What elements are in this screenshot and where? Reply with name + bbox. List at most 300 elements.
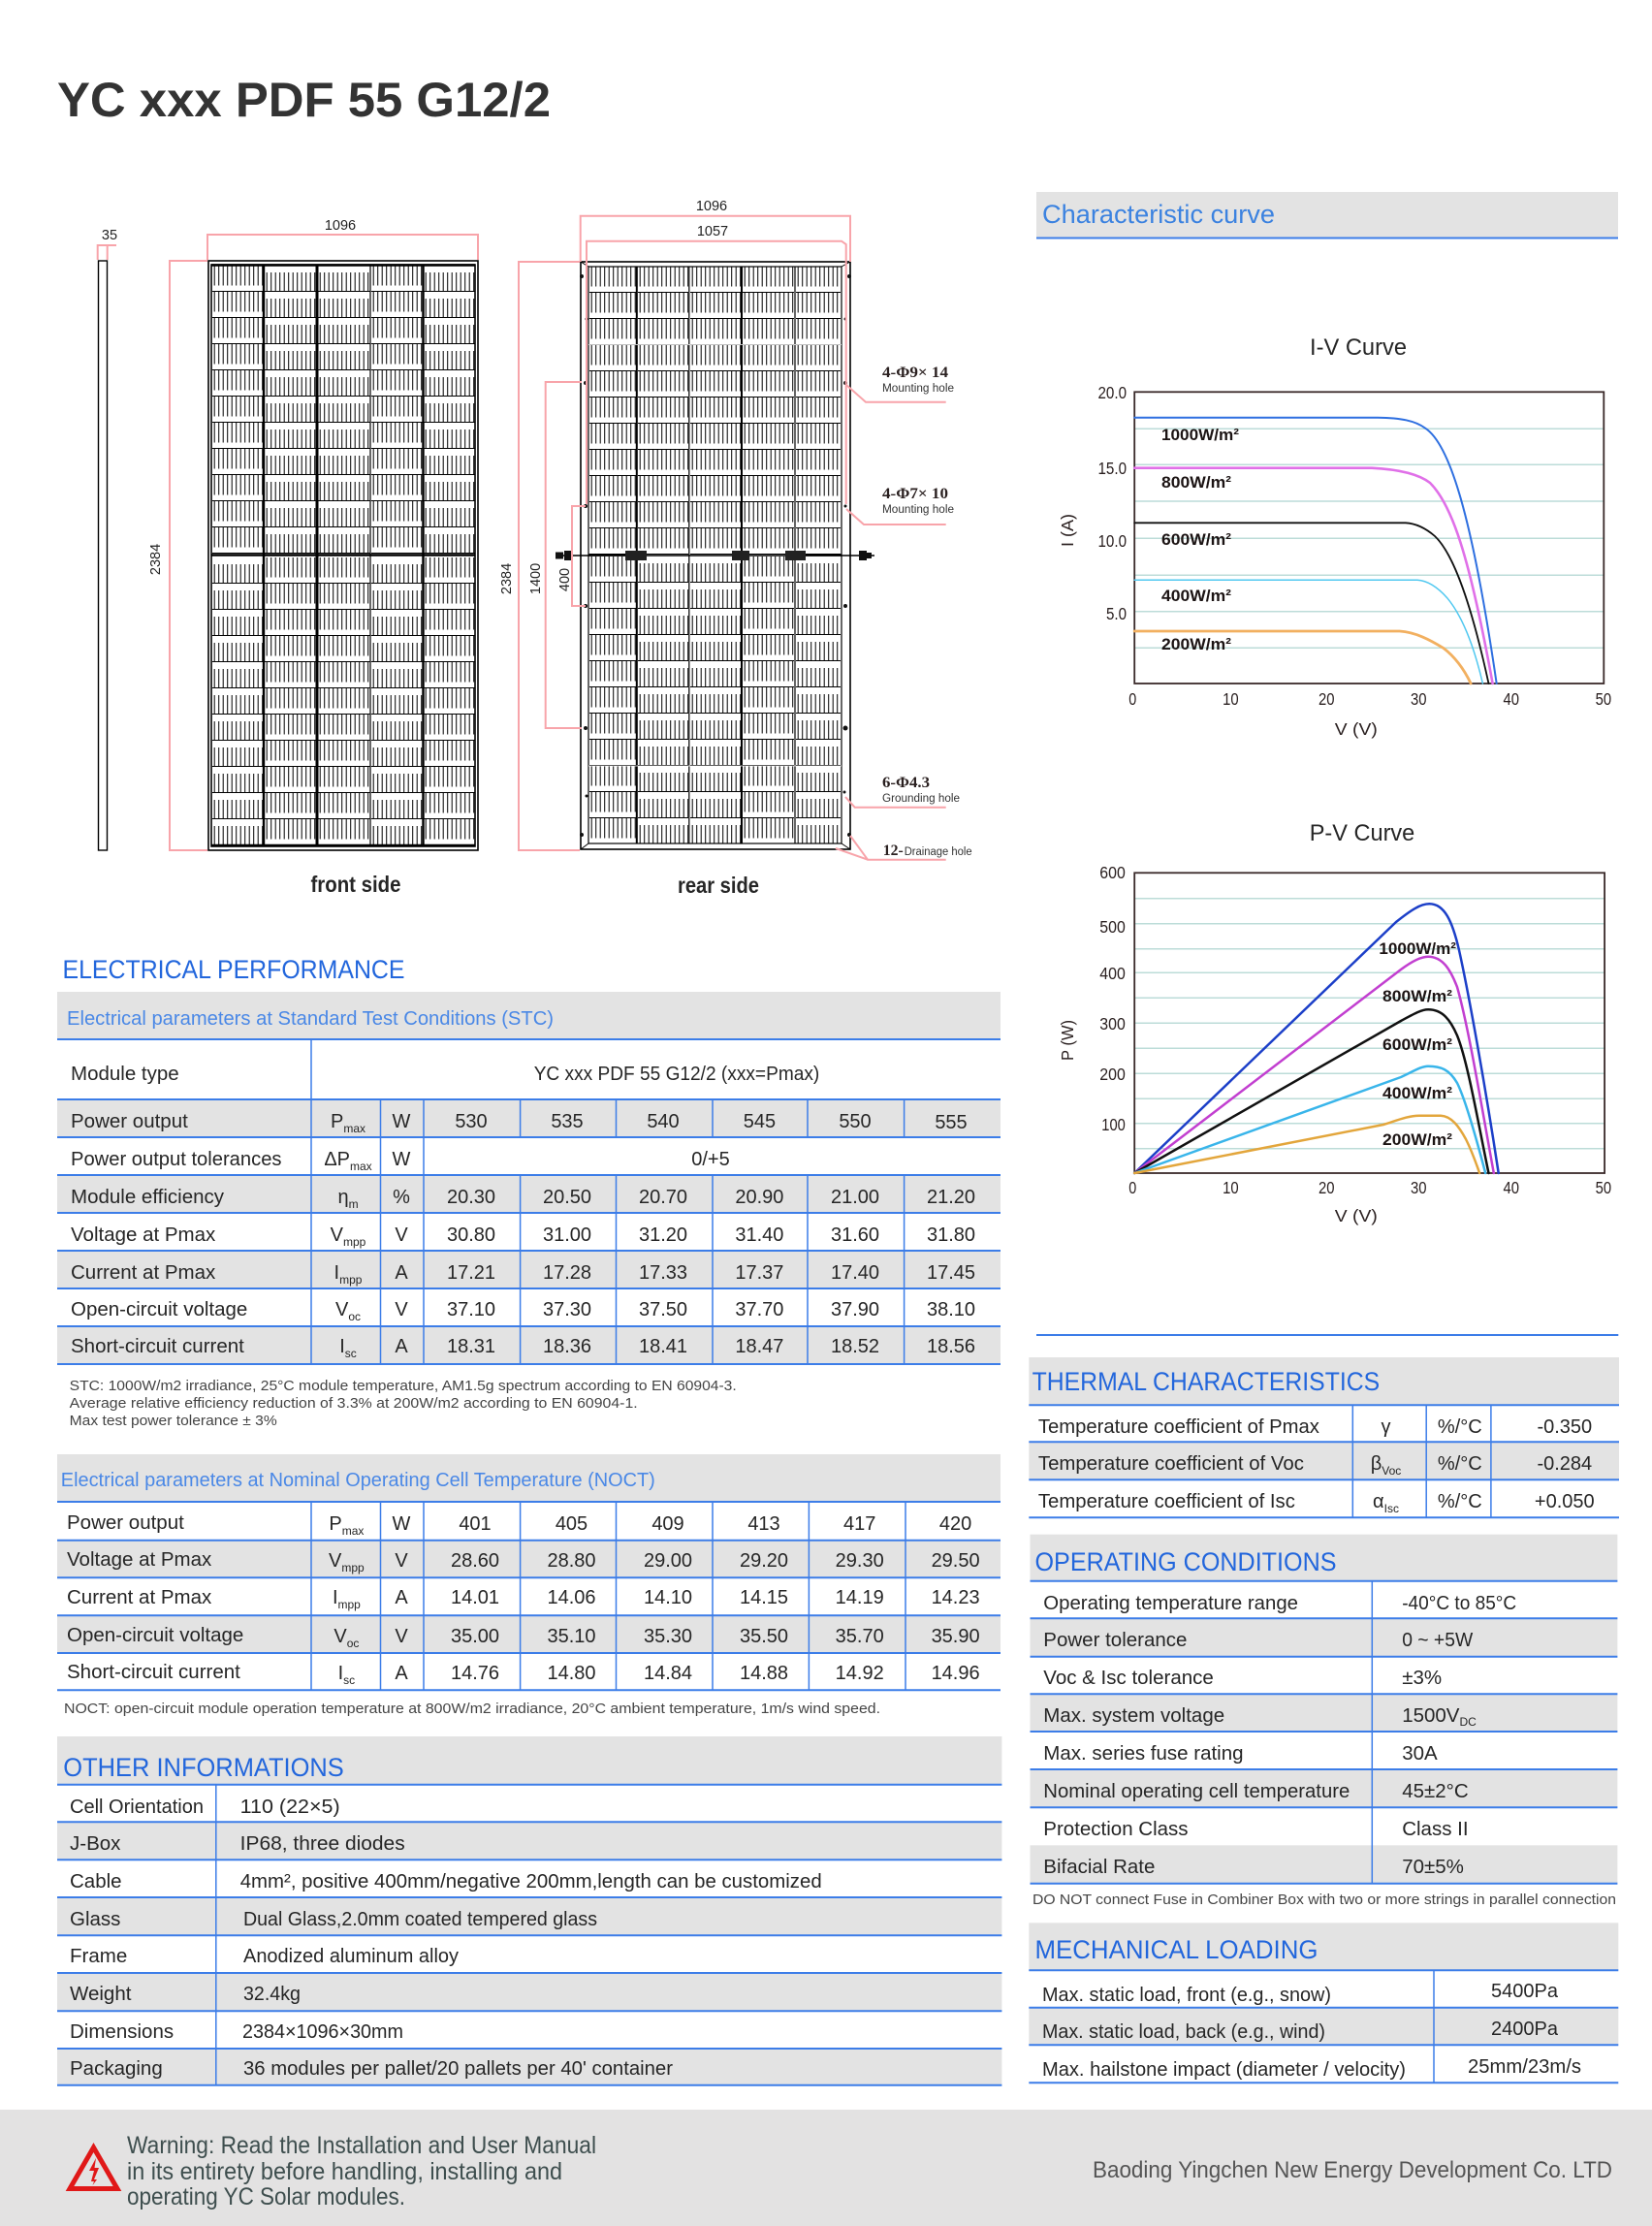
rear dimensions: 2384 bbox=[499, 563, 515, 594]
STC row: module efficiency: η bbox=[337, 1187, 349, 1208]
STC row: module efficiency: % bbox=[393, 1187, 410, 1208]
callout: 12-drainage hole: 12- bbox=[883, 843, 904, 859]
STC row: module type bbox=[71, 1063, 819, 1085]
STC row: open-circuit voltage: V bbox=[335, 1299, 348, 1320]
mechanical row: back load: Max. static load, back (e.g., wind) bbox=[1042, 2020, 1325, 2043]
STC row: open-circuit voltage: 38.10 bbox=[927, 1299, 975, 1320]
callout: 12-drainage hole bbox=[836, 836, 972, 860]
operating row: power tolerance: Power tolerance bbox=[1043, 1629, 1187, 1651]
NOCT row: open-circuit voltage: 35.90 bbox=[932, 1626, 980, 1647]
P-V irradiance labels: 600W/m² bbox=[1382, 1035, 1452, 1054]
STC row: short-circuit current: sc bbox=[345, 1347, 357, 1360]
text block: NOCT note: NOCT: open-circuit module operation temperature at 800W/m2 irradiance, 20°C ambient temperature, 1m/s wind speed. bbox=[64, 1701, 880, 1717]
operating row: Voc and Isc tolerance: Voc & Isc tolerance bbox=[1043, 1667, 1214, 1689]
NOCT row: current at Pmax: 14.01 bbox=[451, 1587, 499, 1608]
title: YC xxx PDF 55 G12/2 bbox=[57, 73, 551, 127]
STC row: current at Pmax: I bbox=[334, 1262, 339, 1284]
NOCT row: short-circuit current bbox=[67, 1661, 980, 1687]
NOCT row: power output bbox=[67, 1511, 971, 1538]
NOCT row: open-circuit voltage: Open-circuit voltage bbox=[67, 1624, 243, 1646]
I-V axis labels: 20.0 bbox=[1097, 383, 1127, 402]
thermal row: Voc: -0.284 bbox=[1537, 1453, 1592, 1475]
callout: 6-Φ4.3 grounding hole: Grounding hole bbox=[882, 793, 960, 805]
panel: characteristic curve heading bbox=[1036, 192, 1618, 238]
row: dimensions bbox=[70, 2020, 403, 2043]
text block: STC notes bbox=[70, 1379, 737, 1429]
NOCT row: open-circuit voltage: 35.50 bbox=[740, 1626, 788, 1647]
P-V axis labels: 300 bbox=[1099, 1014, 1126, 1034]
STC row: power output tolerances: W bbox=[393, 1149, 411, 1170]
I-V axis labels: 20 bbox=[1318, 689, 1335, 709]
STC row: short-circuit current: 18.31 bbox=[447, 1336, 495, 1357]
P-V irradiance labels bbox=[1379, 939, 1456, 1149]
NOCT row: short-circuit current: 14.96 bbox=[932, 1663, 980, 1684]
callout: 6-Φ4.3 grounding hole bbox=[845, 775, 960, 808]
row: glass: Dual Glass,2.0mm coated tempered glass bbox=[243, 1908, 597, 1930]
NOCT row: open-circuit voltage: 35.30 bbox=[644, 1626, 692, 1647]
row: weight: 32.4kg bbox=[243, 1983, 301, 2005]
I-V axis labels: 40 bbox=[1504, 689, 1519, 709]
P-V irradiance labels: 200W/m² bbox=[1382, 1130, 1452, 1149]
STC row: open-circuit voltage: 37.90 bbox=[831, 1299, 879, 1320]
STC header bar: Electrical parameters at Standard Test Conditions (STC) bbox=[67, 1008, 554, 1030]
STC row: voltage at Pmax: 31.40 bbox=[735, 1224, 783, 1246]
other informations row shading bbox=[57, 1822, 1001, 2085]
mechanical row: hailstone impact bbox=[1042, 2056, 1581, 2081]
text block: STC notes: Average relative efficiency reduction of 3.3% at 200W/m2 according to EN 60904-1. bbox=[70, 1396, 638, 1412]
STC row: module efficiency: m bbox=[349, 1197, 359, 1211]
row: dimensions: 2384×1096×30mm bbox=[242, 2020, 403, 2043]
STC row: power output bbox=[71, 1110, 968, 1135]
NOCT row: open-circuit voltage: oc bbox=[347, 1637, 359, 1650]
NOCT header bar bbox=[57, 1454, 1001, 1502]
STC row: short-circuit current: I bbox=[339, 1336, 345, 1357]
NOCT row: short-circuit current: sc bbox=[343, 1673, 355, 1687]
NOCT row: power output: max bbox=[342, 1524, 364, 1538]
rear dimensions bbox=[499, 199, 850, 850]
NOCT row: open-circuit voltage: V bbox=[395, 1626, 408, 1647]
operating row: Voc and Isc tolerance: ±3% bbox=[1402, 1667, 1442, 1689]
front dimensions: 2384 bbox=[148, 544, 164, 575]
row: glass bbox=[70, 1908, 597, 1930]
NOCT row: short-circuit current: 14.88 bbox=[740, 1663, 788, 1684]
STC row shading bbox=[57, 1099, 1001, 1364]
P-V irradiance labels: 800W/m² bbox=[1382, 987, 1452, 1005]
NOCT row: current at Pmax: 14.10 bbox=[644, 1587, 692, 1608]
I-V axis labels: 30 bbox=[1411, 689, 1427, 709]
I-V axis labels: 50 bbox=[1596, 689, 1611, 709]
panel: side view drawing: 35 bbox=[102, 228, 117, 243]
NOCT row: power output: 401 bbox=[459, 1513, 492, 1535]
STC row: voltage at Pmax bbox=[71, 1224, 975, 1249]
NOCT row: power output: 420 bbox=[939, 1513, 971, 1535]
STC row: current at Pmax: Current at Pmax bbox=[71, 1261, 216, 1284]
row: cell orientation: Cell Orientation bbox=[70, 1796, 204, 1818]
callout: 4-Φ7×10 mounting hole: Mounting hole bbox=[882, 504, 954, 516]
STC row: power output: 545 bbox=[744, 1111, 776, 1132]
STC row: short-circuit current: 18.52 bbox=[831, 1336, 879, 1357]
NOCT row: open-circuit voltage: 35.00 bbox=[451, 1626, 499, 1647]
NOCT row: open-circuit voltage: 35.70 bbox=[836, 1626, 884, 1647]
row: cell orientation bbox=[70, 1796, 340, 1818]
thermal row: Pmax: Temperature coefficient of Pmax bbox=[1038, 1415, 1320, 1438]
NOCT row: short-circuit current: 14.84 bbox=[644, 1663, 692, 1684]
STC row: short-circuit current bbox=[71, 1335, 975, 1360]
P-V axis labels: 600 bbox=[1099, 863, 1126, 882]
STC row: voltage at Pmax: 30.80 bbox=[447, 1224, 495, 1246]
NOCT row: voltage at Pmax: Voltage at Pmax bbox=[67, 1548, 212, 1571]
STC row: module efficiency: 21.00 bbox=[831, 1187, 879, 1208]
thermal row: Pmax: %/°C bbox=[1438, 1416, 1482, 1438]
thermal row: Voc: Temperature coefficient of Voc bbox=[1038, 1452, 1304, 1475]
P-V axis labels: V (V) bbox=[1335, 1206, 1378, 1225]
thermal row: Voc: β bbox=[1371, 1453, 1382, 1475]
P-V curves bbox=[1134, 904, 1499, 1173]
STC row: power output tolerances: Power output tolerances bbox=[71, 1148, 281, 1170]
thermal row: Isc: Temperature coefficient of Isc bbox=[1038, 1490, 1295, 1512]
I-V axis labels: 10 bbox=[1223, 689, 1239, 709]
NOCT row: power output: W bbox=[393, 1513, 411, 1535]
STC row: voltage at Pmax: V bbox=[395, 1224, 408, 1246]
STC row: power output tolerances: max bbox=[350, 1160, 372, 1173]
STC row: open-circuit voltage: 37.70 bbox=[735, 1299, 783, 1320]
NOCT row: current at Pmax: 14.06 bbox=[547, 1587, 596, 1608]
operating row: max series fuse rating: 30A bbox=[1402, 1742, 1438, 1765]
front dimensions: 1096 bbox=[325, 218, 356, 234]
NOCT row: voltage at Pmax: 29.20 bbox=[740, 1550, 788, 1572]
NOCT row: voltage at Pmax: 29.50 bbox=[932, 1550, 980, 1572]
P-V axis labels: 0 bbox=[1128, 1178, 1136, 1197]
NOCT row: voltage at Pmax: V bbox=[395, 1550, 408, 1572]
operating shading and grid bbox=[1030, 1581, 1617, 1884]
NOCT row: power output: 417 bbox=[843, 1513, 875, 1535]
STC row: current at Pmax: 17.33 bbox=[639, 1262, 687, 1284]
operating row: protection class: Class II bbox=[1402, 1818, 1469, 1840]
NOCT row: current at Pmax: 14.15 bbox=[740, 1587, 788, 1608]
row: glass: Glass bbox=[70, 1908, 120, 1930]
NOCT row: power output: 405 bbox=[556, 1513, 588, 1535]
mechanical header: MECHANICAL LOADING bbox=[1035, 1935, 1318, 1964]
text block: warning: Warning: Read the Installation and User Manual bbox=[127, 2132, 596, 2159]
rear dimensions: 1057 bbox=[697, 224, 728, 239]
STC row: open-circuit voltage bbox=[71, 1298, 975, 1323]
STC row: power output: 530 bbox=[455, 1111, 488, 1132]
NOCT row: power output: Power output bbox=[67, 1511, 184, 1534]
callout: 4-Φ9×14 mounting hole bbox=[846, 365, 954, 402]
text block: company name: Baoding Yingchen New Energy Development Co. LTD bbox=[1093, 2157, 1612, 2183]
NOCT row: voltage at Pmax: 28.80 bbox=[547, 1550, 596, 1572]
row: dimensions: Dimensions bbox=[70, 2020, 174, 2043]
NOCT row: current at Pmax: mpp bbox=[338, 1598, 361, 1611]
operating row: Voc and Isc tolerance bbox=[1043, 1667, 1442, 1689]
STC row: current at Pmax: 17.40 bbox=[831, 1262, 879, 1284]
NOCT row: voltage at Pmax bbox=[67, 1548, 980, 1574]
I-V axis labels: 0 bbox=[1128, 689, 1136, 709]
mechanical row: hailstone impact: Max. hailstone impact (diameter / velocity) bbox=[1042, 2058, 1406, 2081]
NOCT row: current at Pmax: 14.23 bbox=[932, 1587, 980, 1608]
I-V axis labels bbox=[1058, 383, 1611, 739]
P-V axis labels: 50 bbox=[1596, 1178, 1611, 1197]
NOCT row: current at Pmax: 14.19 bbox=[836, 1587, 884, 1608]
row: cell orientation: 110 (22×5) bbox=[240, 1796, 340, 1818]
panel: STC table bbox=[57, 992, 1001, 1364]
STC row: power output: P bbox=[331, 1111, 343, 1132]
operating header bbox=[1030, 1535, 1617, 1581]
NOCT header bar: Electrical parameters at Nominal Operating Cell Temperature (NOCT) bbox=[61, 1470, 655, 1491]
panel: mechanical loading bbox=[1029, 1923, 1618, 2083]
operating row: power tolerance: 0 ~ +5W bbox=[1402, 1629, 1474, 1651]
I-V irradiance labels bbox=[1161, 426, 1239, 653]
NOCT row: current at Pmax: Current at Pmax bbox=[67, 1586, 212, 1608]
STC row: voltage at Pmax: 31.80 bbox=[927, 1224, 975, 1246]
NOCT row: voltage at Pmax: mpp bbox=[341, 1561, 365, 1574]
I-V irradiance labels: 800W/m² bbox=[1161, 473, 1231, 492]
rear module frame bbox=[581, 262, 850, 849]
STC row: voltage at Pmax: Voltage at Pmax bbox=[71, 1224, 216, 1246]
NOCT row: open-circuit voltage: V bbox=[334, 1626, 347, 1647]
STC row: power output: 540 bbox=[647, 1111, 680, 1132]
STC row: current at Pmax: A bbox=[395, 1262, 408, 1284]
P-V irradiance labels: 1000W/m² bbox=[1379, 939, 1456, 958]
STC row: power output tolerances: 0/+5 bbox=[691, 1149, 730, 1170]
thermal header: THERMAL CHARACTERISTICS bbox=[1032, 1367, 1380, 1396]
row: packaging: 36 modules per pallet/20 pallets per 40' container bbox=[243, 2057, 673, 2080]
operating row: nominal operating cell temperature: Nominal operating cell temperature bbox=[1043, 1780, 1350, 1802]
STC row: module type: Module type bbox=[71, 1063, 179, 1085]
NOCT row: current at Pmax bbox=[67, 1586, 980, 1611]
text block: warning: in its entirety before handling, installing and bbox=[127, 2158, 562, 2185]
STC row: power output: 535 bbox=[551, 1111, 584, 1132]
thermal row: Pmax: -0.350 bbox=[1537, 1416, 1592, 1438]
STC row: voltage at Pmax: mpp bbox=[343, 1235, 366, 1249]
panel: front side drawing bbox=[148, 218, 478, 897]
STC row: module efficiency: Module efficiency bbox=[71, 1186, 225, 1208]
operating row: bifacial rate bbox=[1043, 1856, 1464, 1878]
callout: 4-Φ7×10 mounting hole: 4-Φ7× 10 bbox=[882, 486, 948, 502]
I-V axis labels: 10.0 bbox=[1097, 531, 1127, 551]
row: J-Box: IP68, three diodes bbox=[240, 1832, 405, 1855]
I-V axis labels: V (V) bbox=[1335, 719, 1378, 739]
operating row: temperature range: Operating temperature range bbox=[1043, 1592, 1298, 1614]
NOCT row: short-circuit current: A bbox=[395, 1663, 408, 1684]
operating row: max series fuse rating bbox=[1043, 1742, 1438, 1765]
STC row: short-circuit current: Short-circuit current bbox=[71, 1335, 244, 1357]
STC row: module efficiency: 21.20 bbox=[927, 1187, 975, 1208]
text block: STC notes: Max test power tolerance ± 3% bbox=[70, 1414, 277, 1429]
I-V curves bbox=[1134, 418, 1497, 684]
NOCT row: short-circuit current: 14.76 bbox=[451, 1663, 499, 1684]
label: rear side: rear side bbox=[678, 873, 759, 898]
panel: other informations table bbox=[57, 1736, 1001, 2085]
operating row: max system voltage: 1500V bbox=[1402, 1704, 1459, 1727]
thermal row: Isc: Isc bbox=[1384, 1502, 1399, 1515]
mechanical row: hailstone impact: 25mm/23m/s bbox=[1468, 2056, 1581, 2078]
mechanical row: back load bbox=[1042, 2019, 1559, 2043]
panel: side view drawing bbox=[98, 228, 117, 850]
icon: electric hazard warning triangle bbox=[70, 2147, 117, 2189]
STC row: short-circuit current: 18.41 bbox=[639, 1336, 687, 1357]
rear dimensions: 1096 bbox=[696, 199, 727, 214]
P-V axis labels: 100 bbox=[1101, 1115, 1126, 1134]
row: weight bbox=[70, 1983, 301, 2005]
operating row: temperature range bbox=[1043, 1592, 1516, 1614]
STC grid bbox=[57, 1039, 1001, 1364]
operating row: max system voltage: Max. system voltage bbox=[1043, 1704, 1224, 1727]
STC row: open-circuit voltage: oc bbox=[348, 1310, 361, 1323]
operating row: nominal operating cell temperature: 45±2°C bbox=[1402, 1780, 1469, 1802]
STC row: open-circuit voltage: Open-circuit voltage bbox=[71, 1298, 247, 1320]
NOCT row: open-circuit voltage: 35.10 bbox=[547, 1626, 596, 1647]
NOCT row: open-circuit voltage bbox=[67, 1624, 980, 1650]
STC row: current at Pmax bbox=[71, 1261, 975, 1287]
callout: 6-Φ4.3 grounding hole: 6-Φ4.3 bbox=[882, 775, 930, 791]
NOCT row: voltage at Pmax: 29.30 bbox=[836, 1550, 884, 1572]
NOCT row: short-circuit current: Short-circuit current bbox=[67, 1661, 240, 1683]
NOCT row: voltage at Pmax: V bbox=[329, 1550, 341, 1572]
thermal row: Isc: %/°C bbox=[1438, 1491, 1482, 1512]
STC row: open-circuit voltage: 37.50 bbox=[639, 1299, 687, 1320]
text block: fuse warning note: DO NOT connect Fuse in Combiner Box with two or more strings in parallel connection bbox=[1032, 1892, 1616, 1908]
NOCT row: short-circuit current: I bbox=[338, 1663, 343, 1684]
chart: P-V curve: P-V Curve bbox=[1310, 820, 1414, 846]
label: front side: front side bbox=[310, 872, 401, 897]
STC row: voltage at Pmax: V bbox=[331, 1224, 343, 1246]
STC row: short-circuit current: 18.56 bbox=[927, 1336, 975, 1357]
P-V axis labels: 400 bbox=[1099, 964, 1126, 983]
STC row: power output tolerances bbox=[71, 1148, 730, 1173]
NOCT row: power output: 413 bbox=[747, 1513, 780, 1535]
STC row: current at Pmax: mpp bbox=[339, 1273, 363, 1287]
callout: 12-drainage hole: Drainage hole bbox=[905, 846, 972, 858]
heading: electrical performance: ELECTRICAL PERFORMANCE bbox=[62, 955, 405, 984]
callout: 4-Φ9×14 mounting hole: 4-Φ9× 14 bbox=[882, 365, 948, 381]
mechanical row: front load: Max. static load, front (e.g., snow) bbox=[1042, 1984, 1331, 2006]
NOCT row: voltage at Pmax: 28.60 bbox=[451, 1550, 499, 1572]
STC row: short-circuit current: 18.47 bbox=[735, 1336, 783, 1357]
NOCT row: power output: 409 bbox=[651, 1513, 684, 1535]
panel: operating conditions bbox=[1030, 1535, 1617, 1884]
panel: footer bbox=[0, 2110, 1652, 2226]
I-V irradiance labels: 600W/m² bbox=[1161, 530, 1231, 549]
P-V axis labels: 500 bbox=[1099, 917, 1126, 937]
thermal header bbox=[1029, 1357, 1619, 1405]
operating row: protection class bbox=[1043, 1818, 1469, 1840]
mechanical row: front load: 5400Pa bbox=[1491, 1981, 1559, 2002]
mounting holes bbox=[580, 274, 851, 837]
I-V irradiance labels: 400W/m² bbox=[1161, 587, 1231, 605]
operating row: max system voltage bbox=[1043, 1704, 1477, 1729]
P-V axis labels: 10 bbox=[1223, 1178, 1239, 1197]
STC header bar bbox=[57, 992, 1001, 1039]
text block: warning bbox=[127, 2132, 596, 2210]
STC row: power output: 555 bbox=[935, 1112, 968, 1133]
thermal shading and grid bbox=[1029, 1405, 1619, 1517]
NOCT row: current at Pmax: A bbox=[395, 1587, 408, 1608]
NOCT row: short-circuit current: 14.80 bbox=[547, 1663, 596, 1684]
P-V axis labels: 30 bbox=[1411, 1178, 1427, 1197]
thermal row: Isc: +0.050 bbox=[1535, 1491, 1595, 1512]
P-V axis labels: 40 bbox=[1504, 1178, 1519, 1197]
STC row: current at Pmax: 17.37 bbox=[735, 1262, 783, 1284]
text block: warning: operating YC Solar modules. bbox=[127, 2183, 405, 2210]
NOCT row: short-circuit current: 14.92 bbox=[836, 1663, 884, 1684]
panel: rear side drawing bbox=[499, 199, 972, 898]
operating row: max system voltage: DC bbox=[1459, 1715, 1477, 1729]
operating row: temperature range: -40°C to 85°C bbox=[1402, 1592, 1516, 1614]
STC row: power output: Power output bbox=[71, 1110, 188, 1132]
thermal row: Voc: %/°C bbox=[1438, 1453, 1482, 1475]
I-V irradiance labels: 1000W/m² bbox=[1161, 426, 1239, 444]
row: frame bbox=[70, 1945, 460, 1967]
I-V irradiance labels: 200W/m² bbox=[1161, 635, 1231, 653]
STC row: current at Pmax: 17.28 bbox=[543, 1262, 591, 1284]
STC row: module efficiency: 20.90 bbox=[735, 1187, 783, 1208]
rear dimensions: 1400 bbox=[528, 563, 544, 594]
thermal row: Voc bbox=[1038, 1452, 1592, 1478]
P-V irradiance labels: 400W/m² bbox=[1382, 1084, 1452, 1102]
STC row: voltage at Pmax: 31.00 bbox=[543, 1224, 591, 1246]
text block: STC notes: STC: 1000W/m2 irradiance, 25°C module temperature, AM1.5g spectrum according to EN 60904-3. bbox=[70, 1379, 737, 1394]
row: packaging: Packaging bbox=[70, 2057, 163, 2080]
rear dimensions: 400 bbox=[557, 568, 573, 591]
I-V axis labels: I (A) bbox=[1058, 514, 1077, 547]
STC row: module efficiency bbox=[71, 1186, 975, 1211]
row: cable: Cable bbox=[70, 1870, 122, 1892]
P-V axis labels: P (W) bbox=[1058, 1020, 1077, 1061]
NOCT row: voltage at Pmax: 29.00 bbox=[644, 1550, 692, 1572]
divider above thermal table bbox=[1036, 1334, 1618, 1336]
thermal row: Isc: α bbox=[1373, 1491, 1384, 1512]
mechanical row: back load: 2400Pa bbox=[1491, 2019, 1559, 2040]
operating row: power tolerance bbox=[1043, 1629, 1474, 1651]
STC row: open-circuit voltage: V bbox=[395, 1299, 408, 1320]
operating header: OPERATING CONDITIONS bbox=[1035, 1547, 1336, 1576]
STC row: power output: max bbox=[343, 1122, 365, 1135]
STC row: power output tolerances: ΔP bbox=[324, 1149, 350, 1170]
P-V axis labels: 200 bbox=[1099, 1065, 1126, 1084]
panel: characteristic curve heading: Characteristic curve bbox=[1042, 200, 1275, 229]
I-V axis labels: 5.0 bbox=[1106, 604, 1127, 623]
junction box cables bbox=[556, 551, 874, 560]
NOCT row shading bbox=[57, 1541, 1001, 1653]
chart: P-V curve bbox=[1058, 820, 1611, 1225]
thermal row: Isc bbox=[1038, 1490, 1595, 1515]
row: frame: Anodized aluminum alloy bbox=[243, 1945, 460, 1967]
STC row: power output: W bbox=[393, 1111, 411, 1132]
row: weight: Weight bbox=[70, 1983, 132, 2005]
panel: NOCT table bbox=[57, 1454, 1001, 1690]
callout: 4-Φ9×14 mounting hole: Mounting hole bbox=[882, 383, 954, 395]
callout: 4-Φ7×10 mounting hole bbox=[846, 486, 954, 525]
STC row: power output: 550 bbox=[839, 1111, 872, 1132]
STC row: short-circuit current: 18.36 bbox=[543, 1336, 591, 1357]
NOCT row: current at Pmax: I bbox=[333, 1587, 338, 1608]
STC row: module efficiency: 20.30 bbox=[447, 1187, 495, 1208]
mechanical header bbox=[1029, 1923, 1618, 1970]
operating row: bifacial rate: Bifacial Rate bbox=[1043, 1856, 1155, 1878]
STC row: current at Pmax: 17.21 bbox=[447, 1262, 495, 1284]
chart: I-V curve bbox=[1058, 334, 1611, 739]
row: J-Box bbox=[70, 1832, 405, 1855]
operating row: bifacial rate: 70±5% bbox=[1402, 1856, 1464, 1878]
thermal row: Pmax: γ bbox=[1381, 1416, 1390, 1438]
STC row: module efficiency: 20.70 bbox=[639, 1187, 687, 1208]
mechanical shading and grid bbox=[1029, 1970, 1618, 2083]
STC row: open-circuit voltage: 37.30 bbox=[543, 1299, 591, 1320]
P-V axis labels: 20 bbox=[1318, 1178, 1335, 1197]
STC row: open-circuit voltage: 37.10 bbox=[447, 1299, 495, 1320]
P-V axis labels bbox=[1058, 863, 1611, 1225]
